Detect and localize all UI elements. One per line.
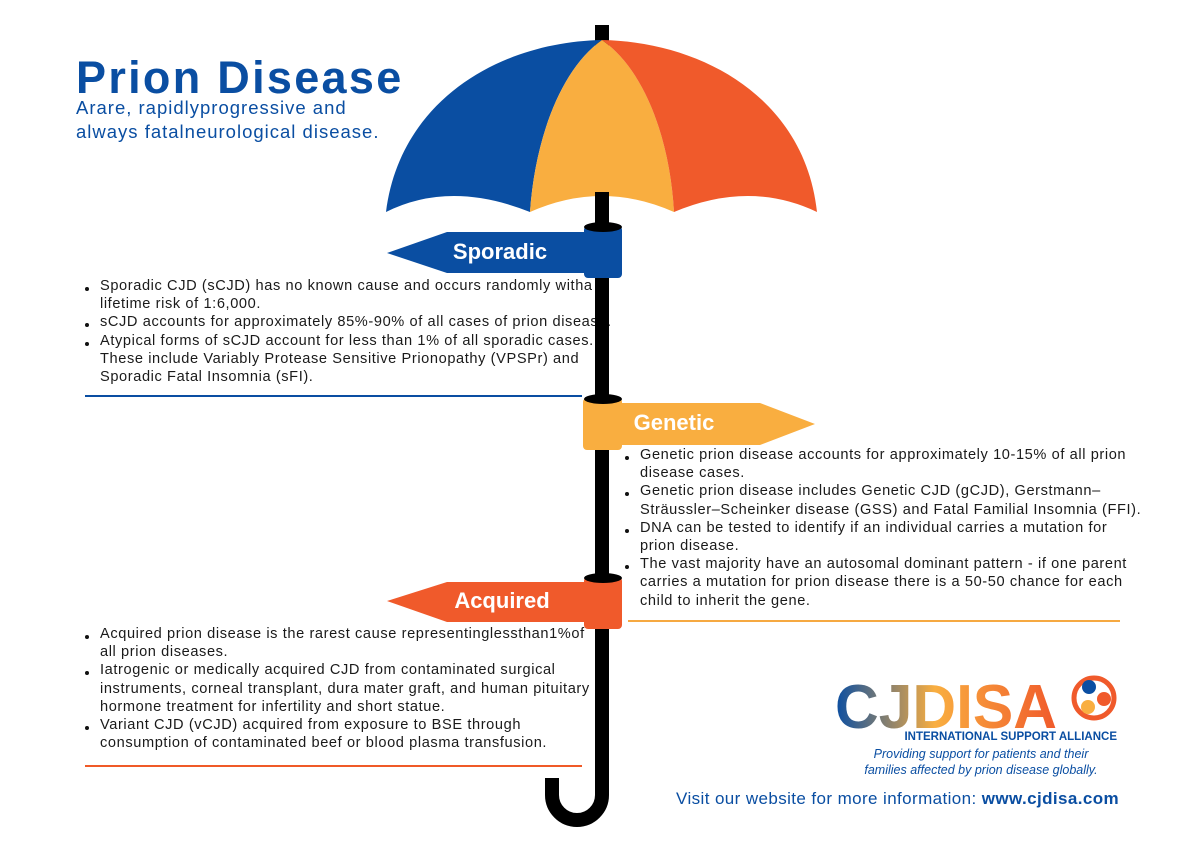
text: acquired: consumption of contaminated beef or blood plasma transfusion.: [100, 735, 547, 751]
text: genetic: carries a mutation for prion disease there is a 50-50 chance for each: [640, 574, 1123, 590]
text: sporadic: lifetime risk of 1:6,000.: [100, 296, 261, 312]
logo: [835, 673, 1117, 777]
text: genetic: [625, 447, 1141, 609]
text: acquired: [85, 626, 590, 751]
text: genetic: Genetic prion disease includes Genetic CJD (gCJD), Gerstmann–: [640, 483, 1101, 499]
title: Prion Disease: [76, 52, 404, 103]
text: genetic: Sträussler–Scheinker disease (GSS) and Fatal Familial Insomnia (FFI).: [640, 502, 1141, 518]
text: sporadic: Sporadic Fatal Insomnia (sFI).: [100, 369, 313, 385]
text: genetic: The vast majority have an autosomal dominant pattern - if one parent: [640, 556, 1127, 572]
logo: Providing support for patients and their: [874, 747, 1089, 761]
logo: CJDISA: [835, 673, 1057, 742]
text: acquired: all prion diseases.: [100, 644, 228, 660]
banner: sporadic: [387, 222, 622, 278]
text: acquired: Iatrogenic or medically acquired CJD from contaminated surgical: [100, 662, 556, 678]
banner: acquired: [387, 573, 622, 629]
text: genetic: Genetic prion disease accounts for approximately 10-15% of all prion: [640, 447, 1126, 463]
canopy: [386, 40, 817, 232]
text: sporadic: These include Variably Protease Sensitive Prionopathy (VPSPr) and: [100, 351, 579, 367]
pole: [552, 25, 609, 820]
subtitle: [76, 97, 379, 142]
subtitle: Arare, rapidlyprogressive and: [76, 97, 347, 118]
text: genetic: disease cases.: [640, 465, 745, 481]
subtitle: always fatalneurological disease.: [76, 121, 379, 142]
text: acquired: Acquired prion disease is the rarest cause representinglessthan1%of: [100, 626, 585, 642]
text: sporadic: Atypical forms of sCJD account for less than 1% of all sporadic cases.: [100, 333, 594, 349]
banner: sporadic: Sporadic: [453, 239, 547, 264]
text: genetic: prion disease.: [640, 538, 739, 554]
website: Visit our website for more information: www.cjdisa.com: [676, 789, 1119, 808]
banner: genetic: Genetic: [634, 410, 714, 435]
banner: genetic: [583, 394, 815, 450]
text: genetic: child to inherit the gene.: [640, 593, 811, 609]
banner: acquired: Acquired: [454, 588, 550, 613]
text: genetic: DNA can be tested to identify if an individual carries a mutation for: [640, 520, 1107, 536]
text: acquired: hormone treatment for infertility and short statue.: [100, 699, 445, 715]
text: sporadic: [85, 278, 612, 385]
text: sporadic: Sporadic CJD (sCJD) has no known cause and occurs randomly witha: [100, 278, 593, 294]
logo: INTERNATIONAL SUPPORT ALLIANCE: [904, 731, 1117, 743]
logo: families affected by prion disease globally.: [864, 763, 1098, 777]
text: acquired: instruments, corneal transplant, dura mater graft, and human pituitary: [100, 681, 590, 697]
text: sporadic: sCJD accounts for approximately 85%-90% of all cases of prion disease.: [100, 314, 612, 330]
text: acquired: Variant CJD (vCJD) acquired from exposure to BSE through: [100, 717, 521, 733]
